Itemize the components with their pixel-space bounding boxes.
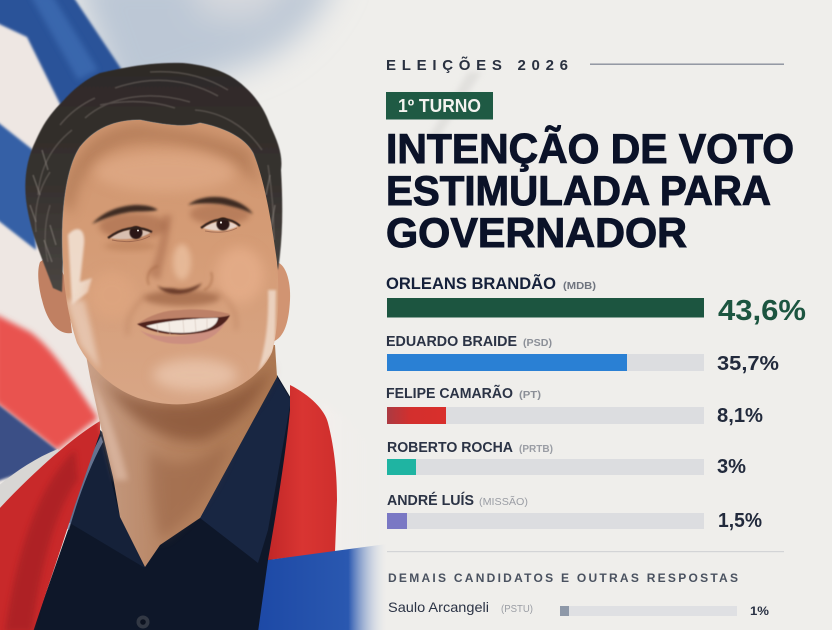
- title: [386, 125, 794, 256]
- candidate: Saulo Arcangeli: [388, 599, 769, 618]
- candidate: Felipe Camarão: (PT): [519, 389, 541, 401]
- right face edge light: [258, 290, 276, 372]
- shirt: [33, 375, 292, 630]
- hairline shade: [60, 124, 262, 215]
- candidate: Orleans Brandão: [386, 273, 806, 327]
- right scarf red: [268, 385, 337, 560]
- candidate: André Luís: ANDRÉ LUÍS: [387, 492, 474, 509]
- neck highlight: [92, 380, 128, 480]
- cheek tones: [82, 280, 91, 294]
- right scarf blue: [258, 544, 387, 630]
- eye socket shadows: [99, 213, 167, 239]
- candidate: Roberto Rocha: ROBERTO ROCHA: [387, 440, 514, 456]
- title: GOVERNADOR: [386, 209, 687, 256]
- ear right: [274, 263, 290, 341]
- ear left: [38, 259, 72, 333]
- candidate: Roberto Rocha: [387, 440, 746, 478]
- candidate: Eduardo Braide: 35,7%: [717, 353, 779, 375]
- eyebrow: Eleições 2026: ELEIÇÕES 2026: [386, 56, 568, 74]
- candidate: André Luís: [387, 492, 762, 532]
- section heading: demais candidatos: DEMAIS CANDIDATOS E OUTRAS RESPOSTAS: [388, 571, 738, 585]
- candidate: Eduardo Braide: [386, 334, 779, 375]
- nose highlight: [173, 244, 191, 280]
- nose bridge shadow: [148, 215, 172, 280]
- hair: [25, 63, 282, 292]
- chin light: [153, 359, 237, 391]
- candidate: Orleans Brandão: 43,6%: [718, 295, 806, 327]
- lower left face light: [66, 300, 100, 370]
- candidate: André Luís: 1,5%: [718, 510, 762, 532]
- candidate: Felipe Camarão: 8,1%: [717, 405, 763, 427]
- left scarf: [0, 421, 100, 630]
- candidate: Roberto Rocha: (PRTB): [519, 443, 553, 455]
- badge: 1º turno: [386, 92, 493, 120]
- right shoulder flag, white part: [322, 400, 387, 556]
- faint diagonal streak: [428, 72, 482, 138]
- candidate: Saulo Arcangeli: Saulo Arcangeli: [388, 599, 489, 615]
- candidate: Orleans Brandão: (MDB): [563, 280, 596, 292]
- candidate: Felipe Camarão: FELIPE CAMARÃO: [386, 384, 513, 402]
- hair texture: [30, 72, 275, 262]
- candidate: Saulo Arcangeli: (PSTU): [501, 603, 533, 615]
- candidate: André Luís: (MISSÃO): [479, 495, 528, 508]
- shirt button: [136, 616, 150, 628]
- flag waving behind: [0, 0, 122, 490]
- collars: [66, 377, 291, 568]
- candidate: Saulo Arcangeli: 1%: [750, 604, 769, 618]
- title: ESTIMULADA PARA: [386, 167, 771, 214]
- left cheek highlight: [68, 229, 92, 305]
- under eye tone: [104, 241, 156, 251]
- eye right: [201, 218, 240, 232]
- title: INTENÇÃO DE VOTO: [386, 125, 794, 172]
- shadow below nose: [144, 290, 220, 306]
- candidate: Eduardo Braide: (PSD): [523, 337, 552, 349]
- candidate: Roberto Rocha: 3%: [717, 456, 746, 478]
- forehead light: [95, 152, 235, 192]
- face: [60, 120, 278, 404]
- smile lines: [126, 300, 140, 330]
- photo: candidate with flag: [0, 0, 387, 630]
- badge: 1º turno: 1º TURNO: [398, 96, 481, 116]
- candidate: Orleans Brandão: ORLEANS BRANDÃO: [386, 273, 556, 293]
- nose: [148, 266, 212, 294]
- eyebrows: [92, 197, 253, 224]
- sky backdrop: [76, 0, 341, 84]
- neck centre shadow: [148, 450, 223, 540]
- candidate: Felipe Camarão: [386, 384, 763, 427]
- eye left: [108, 226, 152, 242]
- mouth: [137, 309, 230, 344]
- neck shadow under chin: [100, 365, 272, 441]
- neck: [85, 345, 277, 567]
- candidate: Eduardo Braide: EDUARDO BRAIDE: [386, 334, 517, 350]
